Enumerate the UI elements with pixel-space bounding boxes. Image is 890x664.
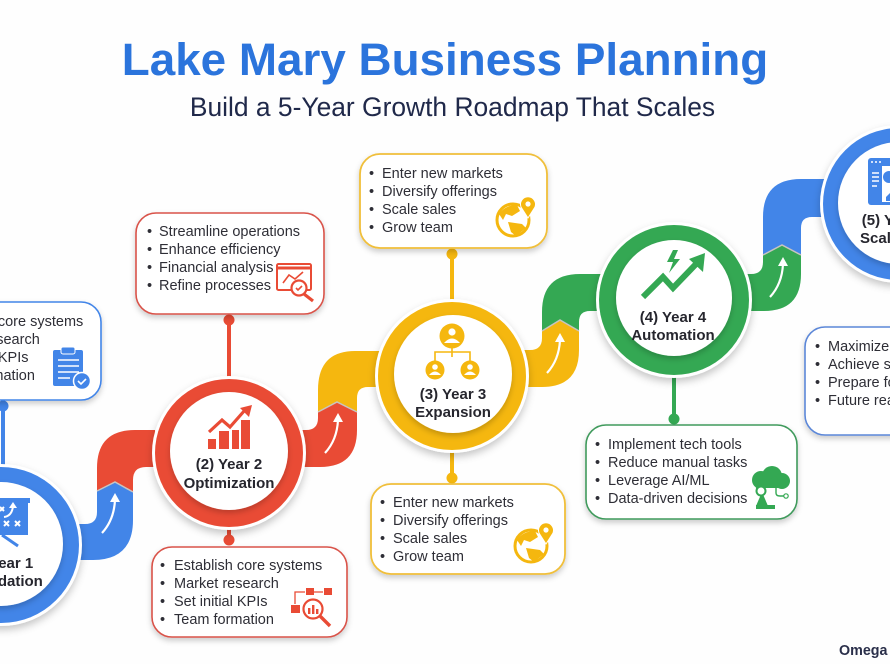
text: year 3 upper tasks: Grow team: [382, 220, 453, 236]
connector: year 3 to year 4: [520, 274, 605, 387]
text: year 3 upper tasks: Diversify offerings: [382, 184, 497, 200]
text: year 2 lower tasks: •: [160, 612, 165, 628]
text: year 4 tasks: •: [595, 437, 600, 453]
subtitle: Build a 5-Year Growth Roadmap That Scales: [190, 92, 715, 122]
panel: year 5 scale tasks: [805, 327, 890, 435]
stem: year 3 top: [446, 248, 458, 304]
text: year 2 lower tasks: •: [160, 576, 165, 592]
text: year 3 lower tasks: •: [380, 531, 385, 547]
node: year 5 scale: [820, 125, 890, 283]
connector: year 4 to year 5: [742, 179, 830, 311]
text: year 5 tasks: •: [815, 375, 820, 391]
arrow: year 4 connector: [770, 257, 788, 297]
text: year 2 tasks: Financial analysis: [159, 260, 273, 276]
title: Lake Mary Business Planning: [122, 34, 768, 85]
text: year 1 tasks: [0, 314, 83, 384]
panel: year 3 upper tasks: [360, 154, 547, 248]
node: year 2 optimization: [152, 376, 306, 530]
text: year 3 upper tasks: Scale sales: [382, 202, 456, 218]
icon: dashboard window: [868, 158, 890, 205]
text: year 2 lower tasks: [160, 558, 322, 628]
text: year 3 lower tasks: •: [380, 513, 385, 529]
node: year 2 optimization: Optimization: [184, 475, 274, 492]
panel: year 3 lower tasks: [371, 484, 565, 574]
text: year 2 tasks: •: [147, 242, 152, 258]
text: year 4 tasks: Implement tech tools: [608, 437, 742, 453]
text: year 4 tasks: •: [595, 455, 600, 471]
text: year 2 lower tasks: Market research: [174, 576, 279, 592]
node: year 4 automation: (4) Year 4: [640, 309, 707, 326]
text: year 3 upper tasks: [369, 166, 503, 236]
node: year 4 automation: [596, 222, 752, 378]
icon: lightning growth arrow: [643, 250, 705, 297]
text: year 2 lower tasks: Establish core systems: [174, 558, 322, 574]
text: year 4 tasks: •: [595, 491, 600, 507]
text: year 5 tasks: •: [815, 339, 820, 355]
text: year 5 tasks: •: [815, 393, 820, 409]
icon: globe with pin: [497, 197, 536, 236]
stem: year 2 top: [224, 314, 234, 382]
text: year 3 lower tasks: Grow team: [393, 549, 464, 565]
icon: robot arm with cloud: [752, 466, 790, 509]
text: year 2 tasks: [147, 224, 300, 294]
stem: year 4: [668, 375, 680, 424]
text: year 2 tasks: Streamline operations: [159, 224, 300, 240]
stem: year 1: [0, 400, 8, 470]
text: year 3 upper tasks: Enter new markets: [382, 166, 503, 182]
text: year 3 upper tasks: •: [369, 220, 374, 236]
text: year 2 lower tasks: •: [160, 594, 165, 610]
text: year 3 lower tasks: Diversify offerings: [393, 513, 508, 529]
panel: year 4 automation tasks: [586, 425, 797, 519]
connector: year 2 to year 3: [296, 351, 385, 467]
text: year 4 tasks: Leverage AI/ML: [608, 473, 710, 489]
node: year 1 foundation: [0, 464, 82, 626]
stem: year 2 bottom: [224, 522, 234, 546]
icon: strategy board: [0, 498, 30, 546]
text: year 3 lower tasks: •: [380, 495, 385, 511]
text: year 4 tasks: Data-driven decisions: [608, 491, 747, 507]
arrow: year 1 connector: [102, 493, 120, 533]
brand name: Omega: [839, 643, 889, 659]
text: year 5 tasks: •: [815, 357, 820, 373]
icon: org chart: [426, 324, 480, 380]
node: year 3 expansion: (3) Year 3: [420, 386, 486, 403]
icon: clipboard check: [53, 347, 90, 390]
icon: analytics window with magnifier: [277, 264, 313, 301]
arrow: year 3 connector: [547, 333, 565, 373]
text: year 2 tasks: Enhance efficiency: [159, 242, 281, 258]
arrow: year 2 connector: [325, 413, 343, 453]
node: year 3 expansion: Expansion: [415, 404, 491, 421]
icon: growth bars: [208, 405, 252, 449]
text: year 2 lower tasks: Team formation: [174, 612, 274, 628]
text: year 3 upper tasks: •: [369, 184, 374, 200]
text: year 4 tasks: [595, 437, 747, 507]
node: year 2 optimization: (2) Year 2: [196, 456, 262, 473]
text: year 2 tasks: Refine processes: [159, 278, 271, 294]
text: year 5 tasks: [815, 339, 890, 409]
node: year 4 automation: Automation: [631, 327, 715, 344]
icon: globe with pin lower: [515, 523, 554, 562]
text: year 3 lower tasks: Scale sales: [393, 531, 467, 547]
text: year 3 upper tasks: •: [369, 202, 374, 218]
node: year 3 expansion: [375, 299, 529, 453]
text: year 2 lower tasks: Set initial KPIs: [174, 594, 268, 610]
connector: year 1 to year 2: [70, 430, 160, 560]
panel: year 2 optimization tasks: [136, 213, 324, 314]
text: year 4 tasks: •: [595, 473, 600, 489]
text: year 2 tasks: •: [147, 224, 152, 240]
text: year 2 tasks: •: [147, 260, 152, 276]
text: year 4 tasks: Reduce manual tasks: [608, 455, 747, 471]
text: year 3 upper tasks: •: [369, 166, 374, 182]
text: year 2 lower tasks: •: [160, 558, 165, 574]
text: year 3 lower tasks: Enter new markets: [393, 495, 514, 511]
stem: year 3 bottom: [446, 448, 458, 484]
text: year 2 tasks: •: [147, 278, 152, 294]
panel: year 1 foundation tasks: [0, 302, 101, 400]
icon: process flow with magnifier: [291, 588, 332, 626]
text: year 3 lower tasks: •: [380, 549, 385, 565]
panel: year 2 foundation tasks: [152, 547, 347, 637]
text: year 3 lower tasks: [380, 495, 514, 565]
